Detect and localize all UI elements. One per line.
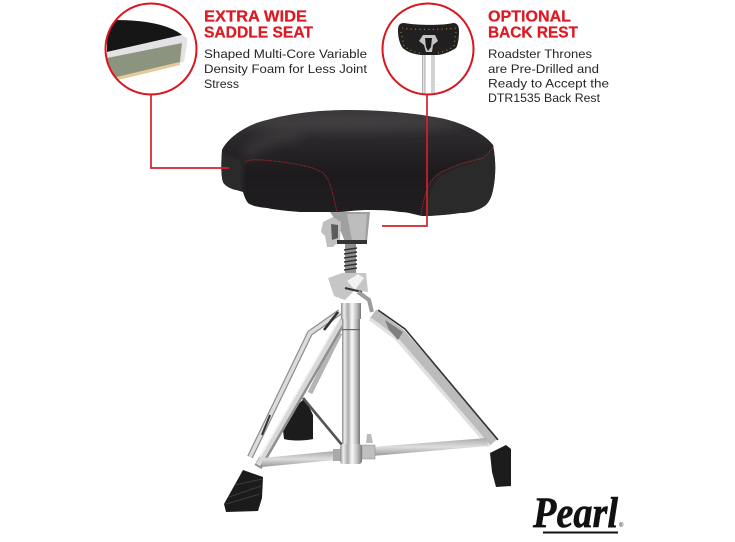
- left front leg: [258, 312, 343, 467]
- heading: SADDLE SEAT: [204, 24, 313, 42]
- centre pole: [342, 303, 360, 464]
- heading: OPTIONAL: [488, 8, 571, 26]
- rear brace: [303, 398, 342, 445]
- lower bracket: [333, 434, 375, 464]
- callout: extra wide saddle seat: [106, 4, 368, 168]
- description: Ready to Accept the: [488, 76, 609, 90]
- clamp: [328, 273, 372, 312]
- left outer leg: [250, 312, 340, 457]
- support rods: [422, 50, 425, 93]
- spring: [344, 244, 357, 276]
- rear strut: [310, 333, 340, 393]
- description: Stress: [204, 77, 239, 91]
- red stitching: [245, 160, 337, 212]
- description: Shaped Multi-Core Variable: [204, 47, 367, 61]
- saddle seat: [218, 110, 498, 218]
- leader line: [151, 95, 229, 168]
- description: DTR1535 Back Rest: [488, 91, 601, 105]
- rear foot: [283, 398, 313, 440]
- description: Roadster Thrones: [488, 47, 592, 61]
- right leg: [370, 310, 498, 446]
- heading: BACK REST: [488, 24, 578, 42]
- leader line: [382, 95, 427, 226]
- chrome stand: [224, 212, 511, 512]
- Pearl logo: Pearl: [532, 490, 618, 537]
- icon: back rest: [382, 4, 474, 94]
- front right foot: [490, 445, 511, 487]
- heading: EXTRA WIDE: [204, 8, 307, 26]
- Pearl logo: ®: [619, 522, 624, 529]
- description: Density Foam for Less Joint: [204, 62, 368, 76]
- callout: optional back rest: [382, 4, 609, 226]
- description: are Pre-Drilled and: [488, 62, 599, 76]
- crossbars: [262, 438, 488, 467]
- icon: foam cross-section: [106, 4, 196, 94]
- front left foot: [224, 470, 263, 512]
- height adjustment collar: [321, 212, 370, 247]
